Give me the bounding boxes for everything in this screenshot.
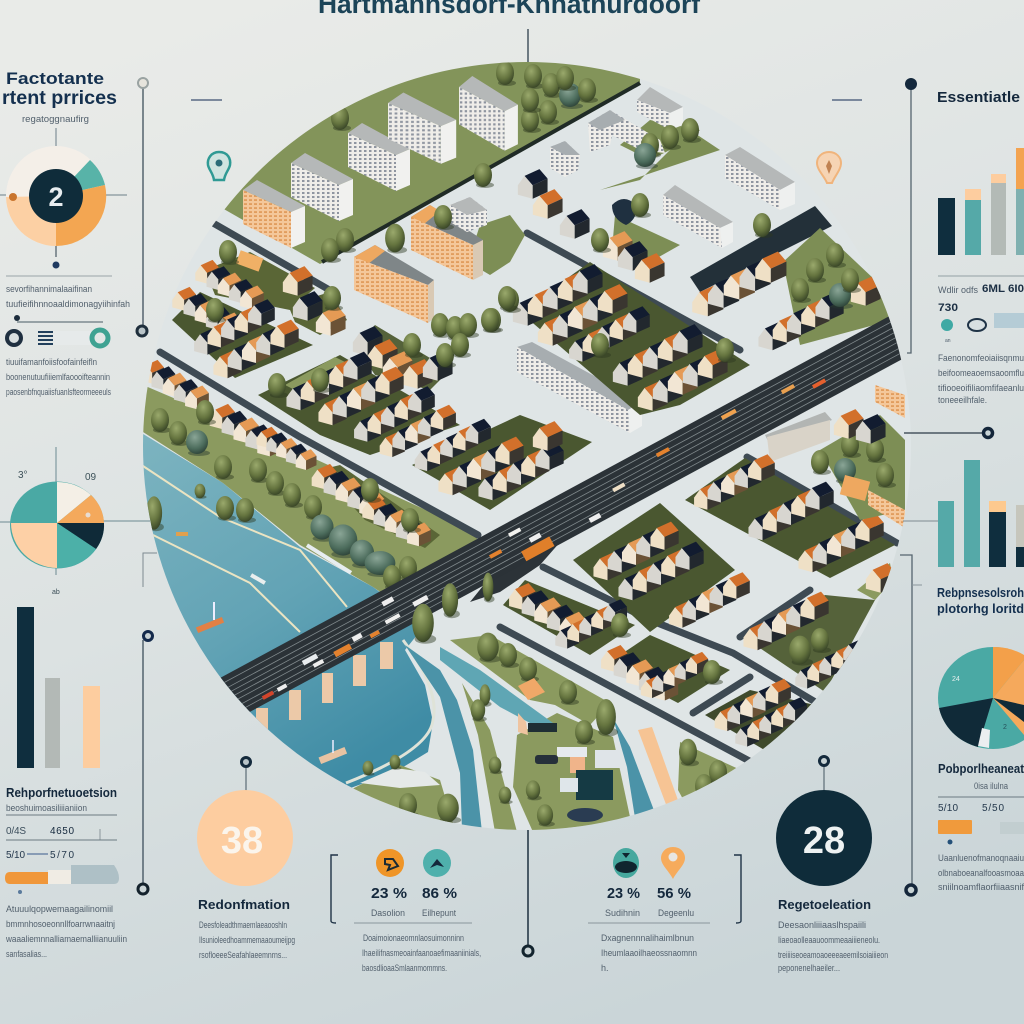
percent values: 56 % (657, 885, 691, 902)
caption: 0isa ilulna (974, 781, 1008, 791)
body text: sevorfihannimalaaifinan (6, 284, 92, 294)
icon: teal badge (423, 849, 451, 877)
heading: Factotante (6, 69, 104, 88)
east trees and buildings (811, 409, 905, 528)
row: central north (603, 231, 881, 350)
dark edge of north green (322, 83, 640, 262)
icon: teal bulb (208, 152, 230, 180)
bars (938, 820, 1024, 844)
highway vehicles (248, 364, 833, 703)
pie chart left: 3° (18, 470, 28, 481)
body text: Iheumlaaoilhaeossnaomnn (601, 948, 697, 958)
highway side trees (412, 573, 618, 745)
house corner east (857, 563, 896, 600)
legend icons (5, 329, 108, 347)
figures (938, 803, 1004, 814)
pie chart right: 2 (1003, 724, 1007, 731)
caption: regatoggnaufirg (22, 114, 89, 124)
apartment blocks north (243, 76, 518, 248)
lower canal channels (405, 645, 655, 832)
white blocks north-east (517, 87, 905, 462)
house block: centre south (412, 415, 592, 510)
body text: boonenutuufiiiemlfaoooifteannin (6, 372, 110, 382)
bar chart mid right (938, 460, 1024, 567)
percent values: Degeenlu (658, 908, 694, 918)
percent values: Eilhepunt (422, 908, 456, 918)
percent values: 23 % (371, 885, 407, 902)
panel: factotate rent prices (0, 69, 130, 397)
panel: representation lower left (5, 785, 127, 959)
local roads (160, 223, 897, 763)
heading: rtent prrices (2, 88, 117, 109)
donut chart (0, 128, 127, 268)
body text: sniilnoamflaorfiiaasnif (938, 882, 1024, 892)
body text: sanfasalias... (6, 949, 47, 959)
heading: Essentiatle (937, 89, 1020, 106)
body text: Dxagnennnalihaimlbnun (601, 933, 694, 943)
icon: teal shield (613, 848, 639, 878)
text: regetoeleation: Regetoeleation (778, 897, 871, 912)
body text: h. (601, 963, 609, 973)
bridge pillars (256, 642, 393, 732)
house block: west 2 (172, 287, 313, 378)
body text: Doaimoionaeomnlaosuimonninn (363, 933, 464, 943)
dark stat circle: 28 (803, 820, 845, 862)
slider (14, 315, 103, 322)
figures table: 5/10 (6, 850, 25, 861)
body text (362, 933, 481, 973)
caption: beoshuimoasiliiianiion (6, 803, 87, 813)
right top tick (832, 99, 862, 101)
body text: toneeeilhfale. (938, 395, 987, 405)
figures table: 0/4S (6, 826, 26, 837)
short tick (191, 99, 222, 101)
left lower bracket (143, 553, 157, 587)
house block: bottom (705, 679, 815, 752)
bracket right (734, 855, 741, 923)
bottom connector (523, 830, 533, 956)
body text: baosdlioaaSmlaanmommns. (362, 963, 447, 973)
body text (938, 353, 1024, 405)
heading: planning (937, 585, 1024, 616)
panel: population (938, 761, 1024, 892)
house block: south centre (601, 635, 730, 703)
left connector with nodes (137, 78, 148, 336)
figures: an (945, 338, 951, 344)
house block: centre west (353, 325, 456, 390)
right lower connector (900, 555, 922, 895)
peach cycle strip (638, 727, 679, 807)
north green with apartment blocks (222, 62, 640, 264)
body text (6, 284, 130, 309)
divider (6, 275, 112, 277)
text: redonfmation: Deesfoleadthmaemlaeaooshln (199, 920, 287, 930)
icon: peach bulb (817, 152, 841, 183)
figures: Wdlir odfs (938, 285, 978, 295)
percent values: 86 % (422, 885, 457, 902)
left lower connector (138, 632, 152, 894)
stacked bar (5, 865, 119, 894)
pie chart right: 24 (952, 676, 960, 683)
figures table: 5/70 (50, 850, 74, 861)
circular aerial map (140, 60, 927, 835)
heading: Rehporfnetuoetsion (6, 785, 117, 800)
body text: tuufieifihnnoaaldimonagyiihinfah (6, 299, 130, 309)
pie chart left (0, 447, 150, 596)
text: regetoeleation: Iiaeoaolleaauoommeaaiiieneolu. (778, 935, 880, 945)
stats: left pair (354, 849, 481, 973)
title connector line (527, 29, 529, 64)
central grove (431, 286, 518, 358)
text: regetoeleation: treiiiiseoeamoaoeeeaeemilsoiaiiieon (778, 950, 888, 960)
highway (220, 307, 927, 717)
river water (140, 432, 433, 810)
body text (601, 933, 697, 973)
body text: paosenbfnquaiisfuanlsfteormeeeuls (6, 387, 111, 397)
body text: IhaeiIifnasmeoainfaanoaefimaaniinials, (362, 948, 481, 958)
donut chart: 2 (48, 182, 64, 212)
icon: orange badge (376, 849, 404, 877)
peach stat circle (197, 758, 293, 886)
text: redonfmation (198, 897, 295, 960)
percent values (371, 885, 457, 918)
boats (176, 532, 352, 764)
house block: south-east (743, 592, 875, 692)
heading (2, 69, 117, 109)
south-east trees (679, 738, 727, 791)
orange mid-rise blocks (354, 197, 487, 323)
residential bank west (143, 385, 480, 600)
text: redonfmation: Ilsunioleedhoammemaaoumeijpg (199, 935, 295, 945)
north-east trees (591, 118, 861, 309)
house block: big centre-west (258, 352, 460, 457)
percent values (605, 885, 694, 918)
south-west park (353, 754, 462, 824)
figures table: 4650 (50, 826, 74, 837)
text: regetoeleation (778, 897, 888, 973)
pie chart left: ab (52, 589, 60, 596)
body text: bmmnhosoeonnllfoarrwnaaitnj (6, 919, 115, 929)
body text: waaaliemnnalliamaemalliianuuliin (5, 934, 127, 944)
body text (6, 357, 111, 397)
river bank trees (146, 421, 419, 590)
house row: river side (140, 360, 316, 470)
figures table (6, 815, 117, 861)
peach stat circle: 38 (221, 820, 263, 862)
dark strip north-east (690, 206, 832, 292)
house block: east (685, 454, 895, 578)
icon: orange pin (661, 847, 685, 879)
connector east (904, 428, 992, 438)
house block: north-east of fork (573, 503, 750, 632)
stats: right pair (588, 847, 710, 973)
heading: planning: plotorhg loritd (937, 601, 1024, 616)
figures: 5/10 (938, 803, 958, 814)
bar chart top right (938, 148, 1024, 255)
body text (5, 904, 127, 959)
figures: 5/50 (982, 803, 1004, 814)
pie chart right (938, 647, 1024, 749)
body text (938, 853, 1024, 892)
pie chart left: 09 (85, 472, 97, 483)
text: regetoeleation: peponenelhaeiler... (778, 963, 840, 973)
bracket left (331, 855, 338, 923)
green patches north-east (468, 120, 893, 345)
figures: 730 (938, 302, 958, 314)
percent values: 23 % (607, 885, 640, 902)
text: redonfmation: Redonfmation (198, 897, 290, 912)
divider (938, 796, 1024, 798)
house block: lower centre (503, 580, 635, 655)
text: regetoeleation: Deesaonliiiaaslhspaiili (778, 920, 866, 930)
connector to bars (903, 520, 938, 522)
south greens (450, 635, 745, 832)
north trees (321, 61, 598, 263)
river banks (143, 466, 434, 783)
divider (938, 275, 1024, 277)
body text: Atuuulqopwemaagailinomiil (6, 904, 113, 914)
house block: central (483, 262, 750, 415)
divider (588, 922, 710, 924)
panel: essentiatle (937, 89, 1024, 405)
house block: west strip (195, 240, 315, 310)
figures (938, 283, 1024, 344)
text: redonfmation: rsofloeeeSeafahlaeemnrns... (199, 950, 287, 960)
percent values: Dasolion (371, 908, 405, 918)
house row: lower west (312, 464, 440, 548)
white houses north-east (518, 169, 636, 239)
figures: 6ML 6I0 (982, 283, 1024, 295)
house block: west 3 (288, 286, 347, 336)
dark stat circle (776, 756, 872, 886)
right upper connector (905, 78, 917, 353)
body text: tiuuifamanfoiisfoofainfeifln (6, 357, 97, 367)
bar chart left (17, 607, 100, 768)
percent values: Sudihnin (605, 908, 640, 918)
riverside buildings south (471, 678, 620, 827)
divider (354, 922, 472, 924)
